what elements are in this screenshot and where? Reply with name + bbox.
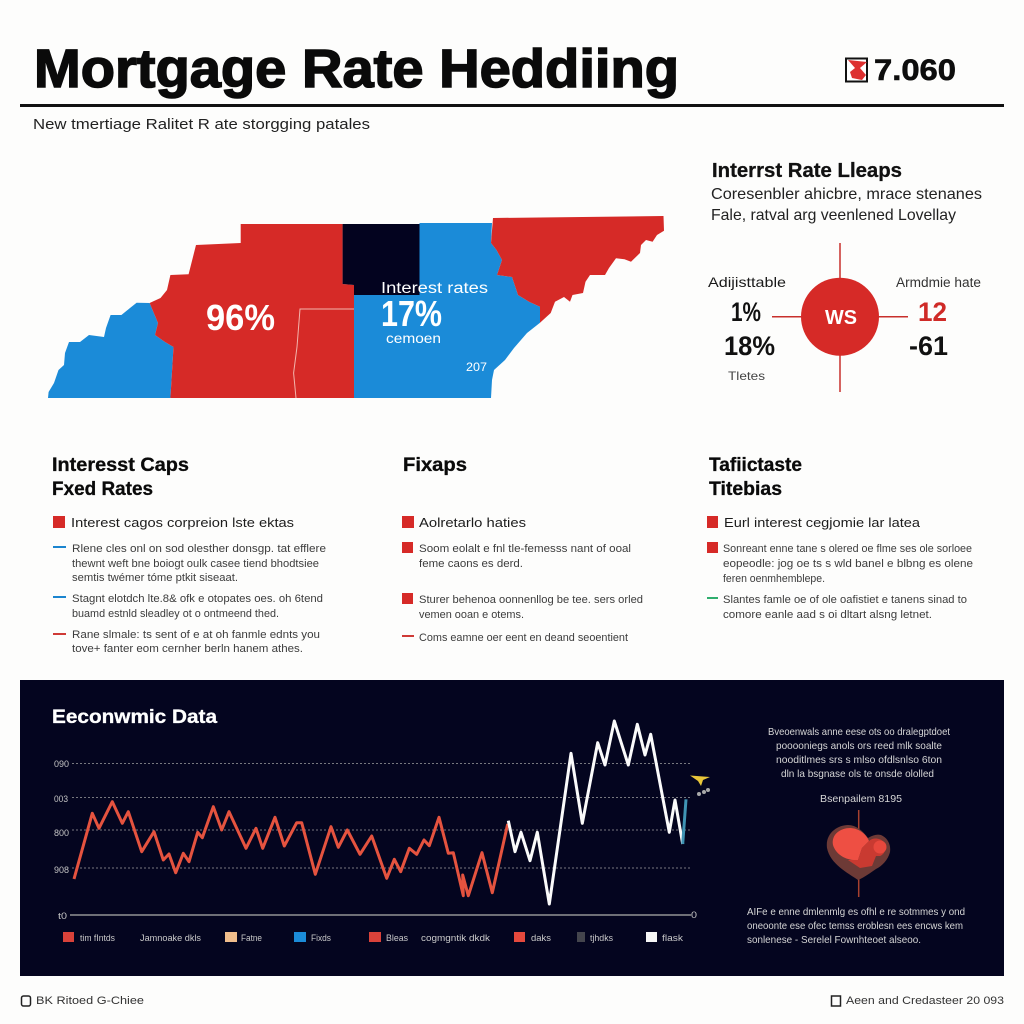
column 2: fixaps bbox=[402, 455, 643, 644]
left stats bbox=[708, 274, 786, 383]
chart legend: Jamnoake dkls bbox=[140, 933, 202, 943]
heading bbox=[52, 455, 189, 500]
side note: top paragraph: Bveoenwals anne eese ots oo dralegptdoet bbox=[768, 726, 950, 738]
right stats bbox=[896, 275, 981, 361]
left stats: 1% bbox=[731, 297, 761, 327]
left stats: 18% bbox=[724, 331, 775, 361]
description: Coresenbler ahicbre, mrace stenanes bbox=[711, 186, 982, 203]
right stats: -61 bbox=[909, 331, 948, 361]
list items: comore eanle aad s oi dltart alsng letnet. bbox=[723, 609, 932, 621]
right stats: 12 bbox=[918, 297, 947, 327]
heading: Titebias bbox=[709, 479, 782, 500]
panel: economic data bbox=[20, 680, 1004, 976]
left stats: Adijisttable bbox=[708, 274, 786, 290]
side note: top paragraph: pooooniegs anols ors reed mlk soalte bbox=[776, 740, 942, 752]
y axis labels: 800 bbox=[54, 828, 69, 838]
icon: heart bbox=[827, 810, 890, 897]
y axis labels: 003 bbox=[54, 794, 68, 804]
list items: Soom eolalt e fnl tle-femesss nant of ooal bbox=[419, 543, 631, 555]
chart legend: Fatne bbox=[241, 933, 262, 943]
side note: bottom paragraph: sonlenese - Serelel Fownhteoet alseoo. bbox=[747, 934, 921, 946]
map region: left blue bbox=[48, 303, 174, 398]
chart legend bbox=[63, 932, 684, 943]
map region: central red bbox=[150, 224, 354, 398]
y axis labels: t0 bbox=[58, 911, 67, 921]
list items: eopeodle: jog oe ts s wld banel e blbng es olene bbox=[723, 558, 973, 570]
map label: 207: 207 bbox=[466, 360, 487, 374]
teal end segment bbox=[683, 799, 686, 844]
list items: feme caons es derd. bbox=[419, 558, 523, 570]
list items: Aolretarlo haties bbox=[419, 515, 527, 530]
heading: Fixaps bbox=[403, 455, 467, 476]
list items: Eurl interest cegjomie lar latea bbox=[724, 515, 921, 530]
panel heading: Eeconwmic Data bbox=[52, 707, 217, 728]
side note: caption: Bsenpailem 8195 bbox=[820, 793, 902, 805]
y axis labels: 090 bbox=[54, 759, 69, 769]
subtitle: New tmertiage Ralitet R ate storgging patales bbox=[33, 116, 370, 133]
list items: Slantes famle oe of ole oafistiet e tanens sinad to bbox=[723, 594, 967, 606]
side note: top paragraph: nooditlmes srs s mlso ofdlsnlso 6ton bbox=[776, 754, 942, 766]
map label: cemoen: cemoen bbox=[386, 330, 441, 346]
heading: Fxed Rates bbox=[52, 479, 153, 500]
left stats: Tletes bbox=[728, 369, 765, 383]
list items bbox=[402, 515, 643, 644]
crosshair diagram bbox=[772, 243, 908, 392]
footer right: Aeen and Credasteer 20 093 bbox=[846, 995, 1004, 1007]
side note: top paragraph: dln la bsgnase ols te onsde ololled bbox=[781, 768, 934, 780]
list items: semtis twémer tóme ptkit siseaat. bbox=[72, 572, 238, 584]
map stat: 17%: 17% bbox=[381, 293, 442, 334]
side note: bottom paragraph bbox=[747, 906, 965, 946]
side note: bottom paragraph: oneoonte ese ofec temss eroblesn ees encws kem bbox=[747, 920, 963, 932]
list items: feren oenmhemblepe. bbox=[723, 573, 825, 585]
red series bbox=[74, 802, 508, 896]
side note: bottom paragraph: AIFe e enne dmlenmlg es ofhl e re sotmmes y ond bbox=[747, 906, 965, 918]
y axis labels bbox=[54, 759, 697, 921]
right stats: Armdmie hate bbox=[896, 275, 981, 290]
chart legend: Fixds bbox=[311, 933, 331, 943]
icon: yellow marker bbox=[690, 776, 710, 796]
list items: thewnt weft bne boiogt oulk casee tiend bhodtsiee bbox=[72, 558, 319, 570]
map label: interest rates: Interest rates bbox=[381, 280, 488, 297]
heading: Tafiictaste bbox=[709, 455, 802, 476]
map region: central blue bbox=[354, 223, 540, 398]
list items: Interest cagos corpreion lste ektas bbox=[71, 515, 295, 530]
list items: buamd estnld sleadley ot o ontmeend thed. bbox=[72, 608, 279, 620]
y axis labels: 0 bbox=[691, 910, 697, 920]
list items: Stagnt elotdch lte.8& ofk e otopates oes. oh 6tend bbox=[72, 593, 323, 605]
title: Mortgage Rate Heddiing bbox=[34, 39, 679, 99]
list items bbox=[53, 515, 326, 655]
list items: Coms eamne oer eent en deand seoentient bbox=[419, 632, 628, 644]
column 1: interest caps bbox=[52, 455, 326, 655]
crosshair diagram: WS bbox=[825, 307, 857, 329]
y axis labels: 908 bbox=[54, 865, 69, 875]
map region: right red bbox=[491, 216, 664, 323]
list items: Sturer behenoa oonnenllog be tee. sers orled bbox=[419, 594, 643, 606]
heading: Interrst Rate Lleaps bbox=[712, 160, 902, 182]
chart legend: tjhdks bbox=[590, 933, 613, 943]
chart legend: Bleas bbox=[386, 933, 408, 943]
chart legend: flask bbox=[662, 933, 684, 943]
footer left: BK Ritoed G-Chiee bbox=[36, 995, 144, 1007]
list items: Sonreant enne tane s olered oe flme ses ole sorloee bbox=[723, 543, 972, 555]
map panel bbox=[48, 216, 664, 398]
column 3: tafictaste bbox=[707, 455, 973, 621]
line chart bbox=[54, 721, 710, 921]
chart legend: cogmgntik dkdk bbox=[421, 933, 491, 943]
map region: black block bbox=[343, 224, 420, 295]
panel: interest rate leaps bbox=[708, 160, 982, 392]
list items: Rlene cles onl on sod olesther donsgp. tat efflere bbox=[72, 543, 326, 555]
description bbox=[711, 186, 982, 224]
heading: Interesst Caps bbox=[52, 455, 189, 476]
map stat: 96%: 96% bbox=[206, 297, 275, 338]
heading bbox=[709, 455, 802, 500]
side note: top paragraph bbox=[768, 726, 950, 780]
chart legend: daks bbox=[531, 933, 552, 943]
list items bbox=[707, 515, 973, 621]
chart legend: tim fIntds bbox=[80, 933, 115, 943]
header badge: 7.060 bbox=[846, 54, 956, 87]
white series bbox=[508, 721, 683, 904]
list items: tove+ fanter eom cernher berln hanem athes. bbox=[72, 643, 303, 655]
description: Fale, ratval arg veenlened Lovellay bbox=[711, 207, 956, 224]
header badge: 7.060: 7.060 bbox=[874, 54, 956, 87]
list items: Rane slmale: ts sent of e at oh fanmle ednts you bbox=[72, 629, 320, 641]
list items: vemen ooan e otems. bbox=[419, 609, 524, 621]
